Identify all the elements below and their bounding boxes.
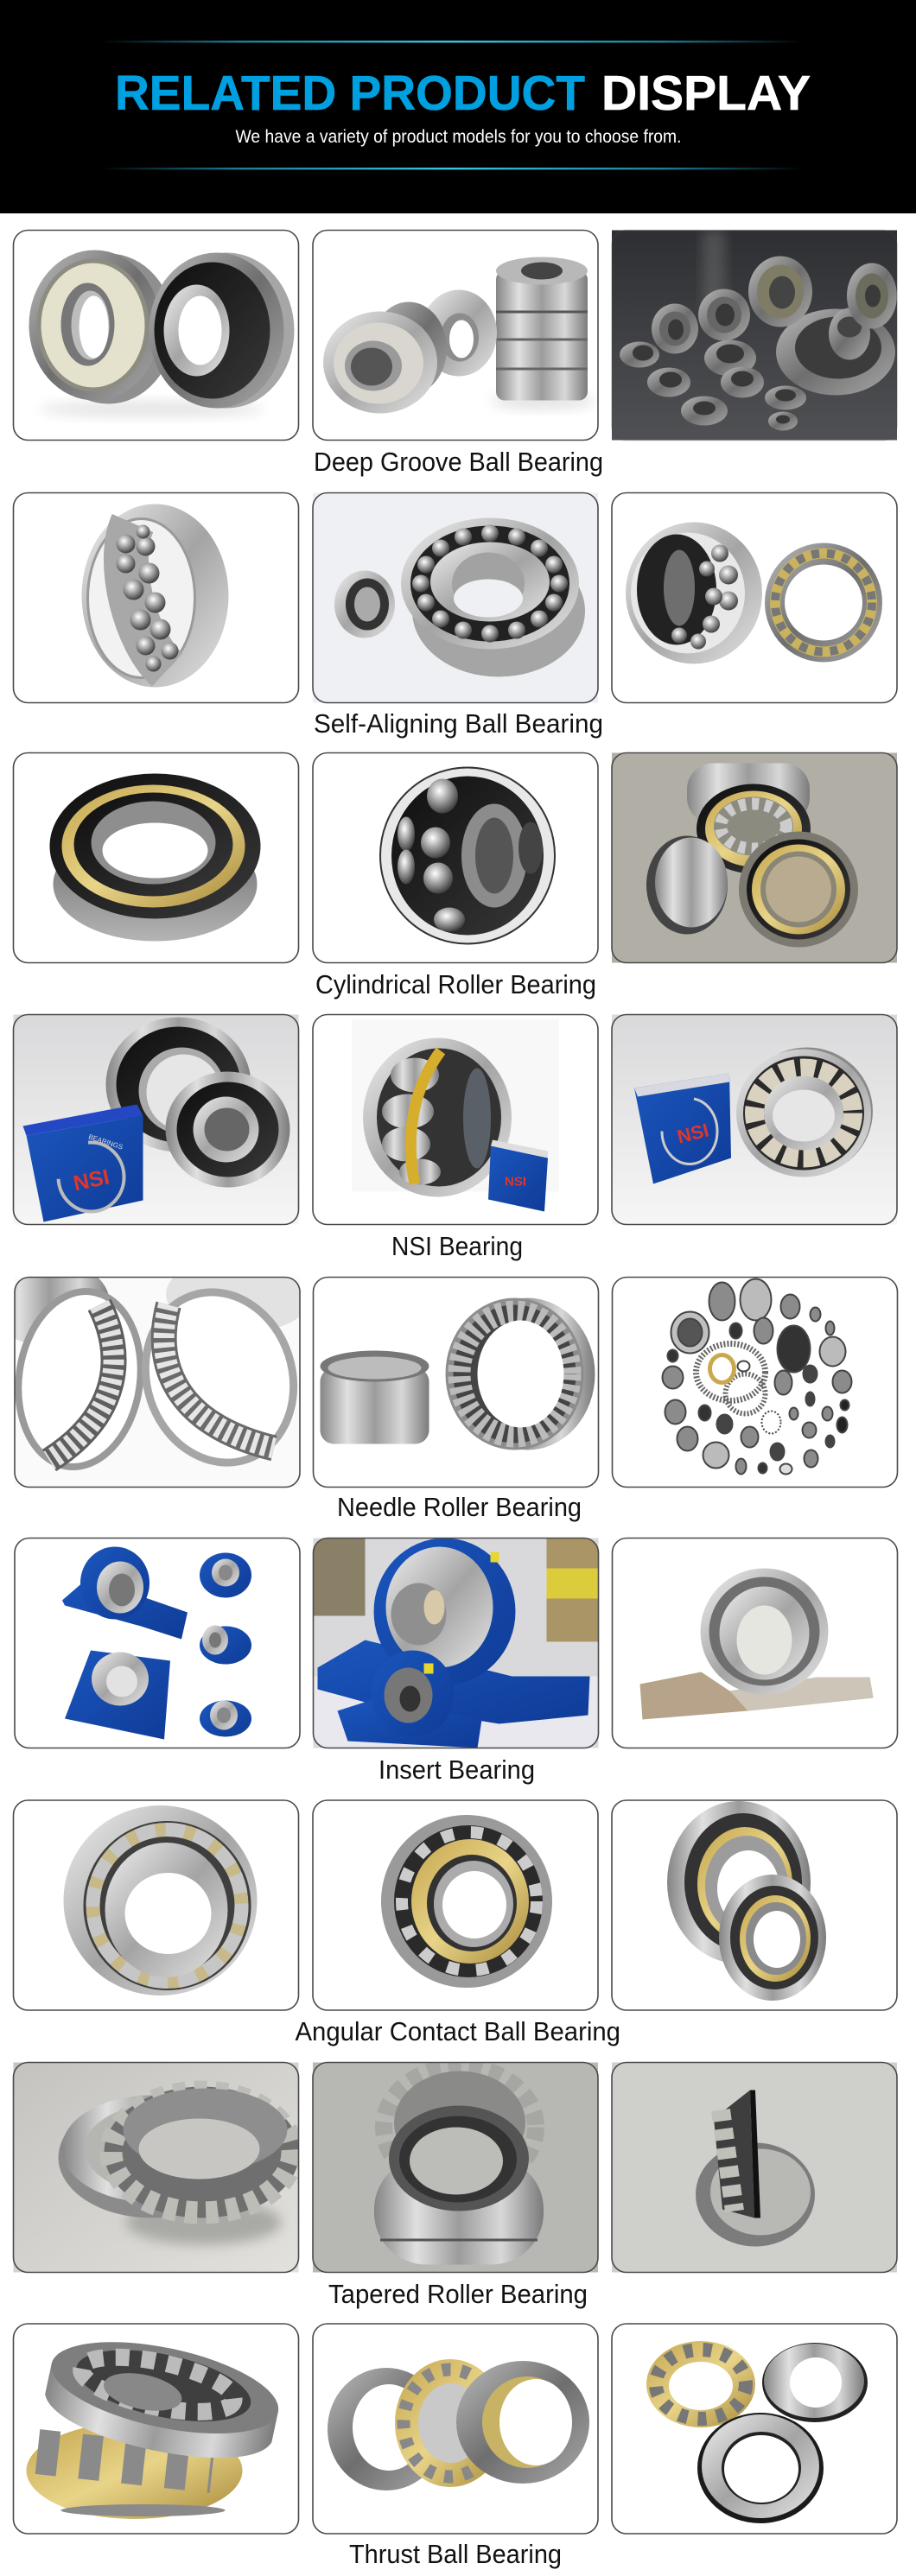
icon: blue flange block	[65, 1650, 170, 1740]
panel: cylindrical 3	[612, 753, 897, 962]
icon: open bearing with balls	[81, 504, 228, 688]
icon: bearing stack	[496, 257, 588, 401]
icon: lower cup	[374, 2158, 544, 2265]
icon: brass cage	[646, 2341, 755, 2427]
panel: cylindrical 2	[313, 753, 598, 962]
icon: tapered cone	[104, 2087, 299, 2218]
panel: thrust 1	[14, 2324, 299, 2534]
icon: small blue pillow block	[337, 1650, 482, 1748]
panel: NSI 1	[14, 1014, 299, 1225]
icon: inner sleeve	[320, 1351, 429, 1444]
icon: outer cup	[59, 2096, 245, 2218]
icon: brass cage bearing	[381, 1815, 552, 1988]
icon: small flange 2	[200, 1626, 251, 1664]
icon: big blue pillow block	[318, 1538, 589, 1724]
icon: tapered cone	[714, 2091, 760, 2218]
panel: insert 3	[612, 1538, 897, 1748]
icon: right needle ring	[142, 1288, 297, 1467]
title: RELATED PRODUCT	[115, 66, 585, 121]
icon: right washer	[456, 2361, 589, 2484]
icon: back bearing	[667, 1801, 811, 1964]
icon: sleeve	[646, 836, 728, 935]
icon: NSI box: NSI	[675, 1119, 711, 1148]
panel: needle roller 1	[14, 1277, 301, 1488]
panel: tapered 3	[612, 2063, 897, 2272]
panel: angular contact 2	[313, 1800, 598, 2010]
panel: NSI 3	[612, 1014, 897, 1225]
panel: insert 1	[15, 1538, 300, 1748]
caption: insert: Insert Bearing	[378, 1754, 535, 1785]
panel: thrust 3	[612, 2324, 897, 2534]
icon: NSI box: NSI	[71, 1164, 111, 1196]
panel: deep groove 3	[612, 230, 897, 441]
title: DISPLAY	[601, 66, 811, 121]
icon: large bearing	[401, 518, 585, 677]
caption: NSI: NSI Bearing	[391, 1231, 523, 1261]
icon: outer cup	[696, 2142, 815, 2246]
icon: steel washer	[38, 2325, 286, 2474]
icon: caged roller bearing	[736, 1047, 873, 1177]
icon: large washer	[697, 2413, 824, 2523]
panel: angular contact 3	[612, 1800, 897, 2010]
panel: cylindrical 1	[14, 753, 299, 962]
icon: NSI box: BEARINGS	[87, 1133, 124, 1152]
panel: NSI 2	[313, 1014, 598, 1225]
icon: front bearing	[719, 1875, 826, 2001]
icon: front roller bearing	[739, 831, 858, 947]
panel: deep groove 2	[313, 230, 598, 441]
icon: tapered cone	[384, 2066, 536, 2187]
panel: thrust 2	[313, 2324, 598, 2534]
icon: back sealed bearing	[105, 1018, 251, 1152]
icon: small flange 1	[200, 1553, 251, 1598]
panel: self-aligning 3	[612, 492, 897, 703]
panel: self-aligning 1	[14, 492, 299, 703]
caption: angular contact: Angular Contact Ball Bearing	[296, 2016, 620, 2046]
icon: NSI box	[488, 1140, 548, 1211]
icon: left needle ring	[16, 1288, 143, 1472]
icon: NSI box	[22, 1104, 143, 1221]
icon: front sealed bearing	[166, 1071, 290, 1187]
icon: gold roller cage	[26, 2422, 242, 2519]
icon: gray washer	[762, 2343, 868, 2422]
panel: self-aligning 2	[313, 492, 598, 703]
panel: needle roller 2	[313, 1277, 598, 1488]
subtitle: We have a variety of product models for you to choose from.	[235, 127, 681, 147]
panel: insert 2	[313, 1538, 598, 1748]
icon: front bearing	[323, 311, 437, 413]
icon: NSI box	[634, 1073, 731, 1183]
icon: back roller bearing	[687, 764, 811, 874]
icon: small bearing	[334, 570, 395, 638]
caption: thrust: Thrust Ball Bearing	[349, 2539, 562, 2569]
icon: NSI box: NSI	[505, 1175, 526, 1189]
panel: deep groove 1	[14, 230, 299, 441]
caption: self-aligning: Self-Aligning Ball Bearing	[314, 708, 603, 739]
caption: cylindrical: Cylindrical Roller Bearing	[315, 969, 596, 999]
header banner	[0, 0, 916, 213]
icon: centre ring	[389, 2106, 529, 2211]
icon: right bearing	[765, 542, 882, 662]
caption: deep groove: Deep Groove Ball Bearing	[314, 447, 603, 477]
icon: left bearing	[626, 522, 762, 663]
panel: needle roller 3	[612, 1277, 897, 1488]
icon: sealed bearing	[149, 252, 283, 408]
icon: needle bearing collection	[662, 1278, 852, 1474]
icon: shielded bearing	[29, 251, 161, 401]
panel: angular contact 1	[14, 1800, 299, 2010]
icon: needle bearing	[446, 1298, 595, 1450]
panel: tapered 1	[14, 2063, 299, 2272]
icon: blue pillow block	[62, 1546, 188, 1640]
icon: angular bearing	[64, 1805, 258, 1995]
icon: left washer	[328, 2368, 445, 2490]
caption: needle roller: Needle Roller Bearing	[337, 1492, 582, 1522]
icon: spherical roller bearing	[380, 767, 555, 943]
icon: silver pillow block	[639, 1569, 873, 1719]
icon: small flange 3	[200, 1700, 251, 1736]
panel: tapered 2	[313, 2063, 598, 2272]
icon: scattered bearings	[620, 256, 897, 430]
icon: black and brass bearing	[50, 774, 261, 942]
caption: tapered: Tapered Roller Bearing	[328, 2279, 588, 2309]
icon: brass cage bearing	[363, 1038, 512, 1197]
icon: brass cage	[395, 2359, 506, 2487]
